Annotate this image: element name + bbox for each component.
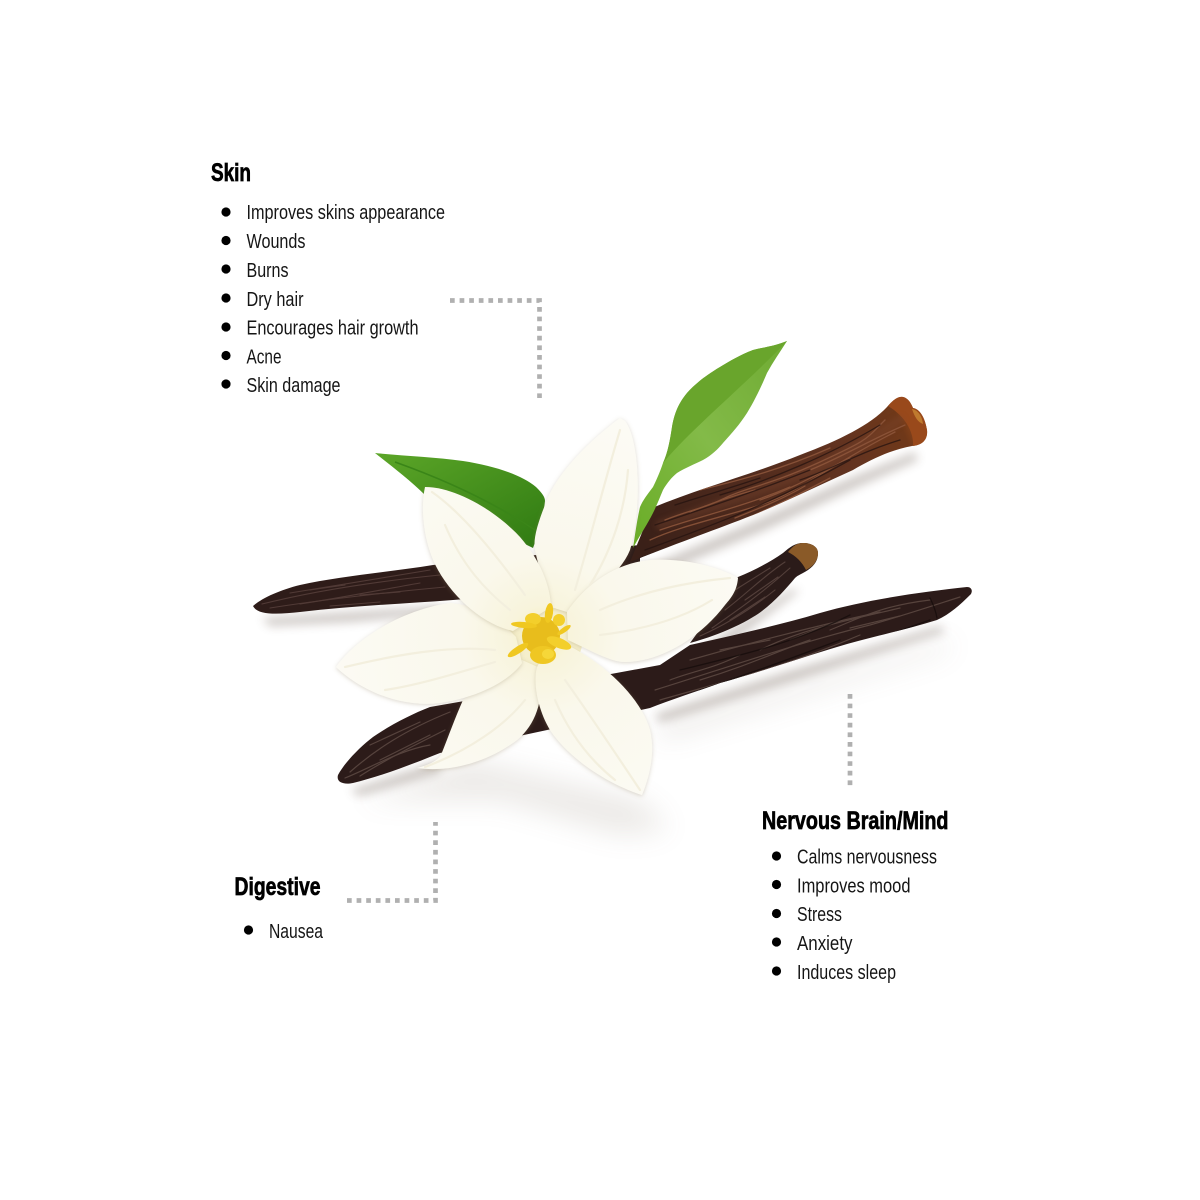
list: skin benefits: Burns [246,259,288,282]
flower center: stamen [506,603,573,664]
list: nervous benefits [772,846,937,984]
list: skin benefits: Improves skins appearance [246,201,445,224]
panel: skin [211,159,445,397]
list: skin benefits: Wounds [246,230,306,253]
petal: left [336,603,522,704]
list: skin benefits: Acne [246,346,282,368]
list: nervous benefits: Improves mood [797,874,910,898]
list: skin benefits [221,201,445,397]
connector: nervous [848,694,852,786]
connector: skin [450,300,540,398]
flower: white petals with yellow center [336,418,738,795]
petal veins [345,430,730,790]
list: nervous benefits: Calms nervousness [797,846,937,868]
leaf: left green leaf [375,453,545,548]
connector: digestive [347,822,436,900]
list: nervous benefits: Induces sleep [797,961,896,984]
list: skin benefits: Dry hair [246,288,304,311]
heading: digestive: Digestive [234,873,321,901]
list: digestive benefits: Nausea [269,920,323,943]
petal: right [567,560,738,662]
petal: top [534,418,638,612]
pod: long dark pod [338,587,972,784]
panel: digestive [234,873,323,943]
list: nervous benefits: Stress [797,903,842,926]
soft shadows [262,452,950,835]
leaf: right green leaf [633,341,787,548]
heading: nervous brain/mind: Nervous Brain/Mind [762,807,948,835]
petal: bottom right [536,643,652,795]
pod: top brown pod [253,397,927,614]
flower base [499,595,583,679]
petal: bottom left [417,660,541,769]
panel: nervous brain/mind [762,807,948,984]
list: nervous benefits: Anxiety [797,932,853,955]
pod: small dark pod [690,543,818,643]
petal: upper left [423,487,551,631]
list: skin benefits: Skin damage [246,374,340,397]
heading: skin: Skin [211,159,251,187]
list: skin benefits: Encourages hair growth [246,316,418,340]
illustration: vanilla flower with pods and leaves [253,341,972,835]
